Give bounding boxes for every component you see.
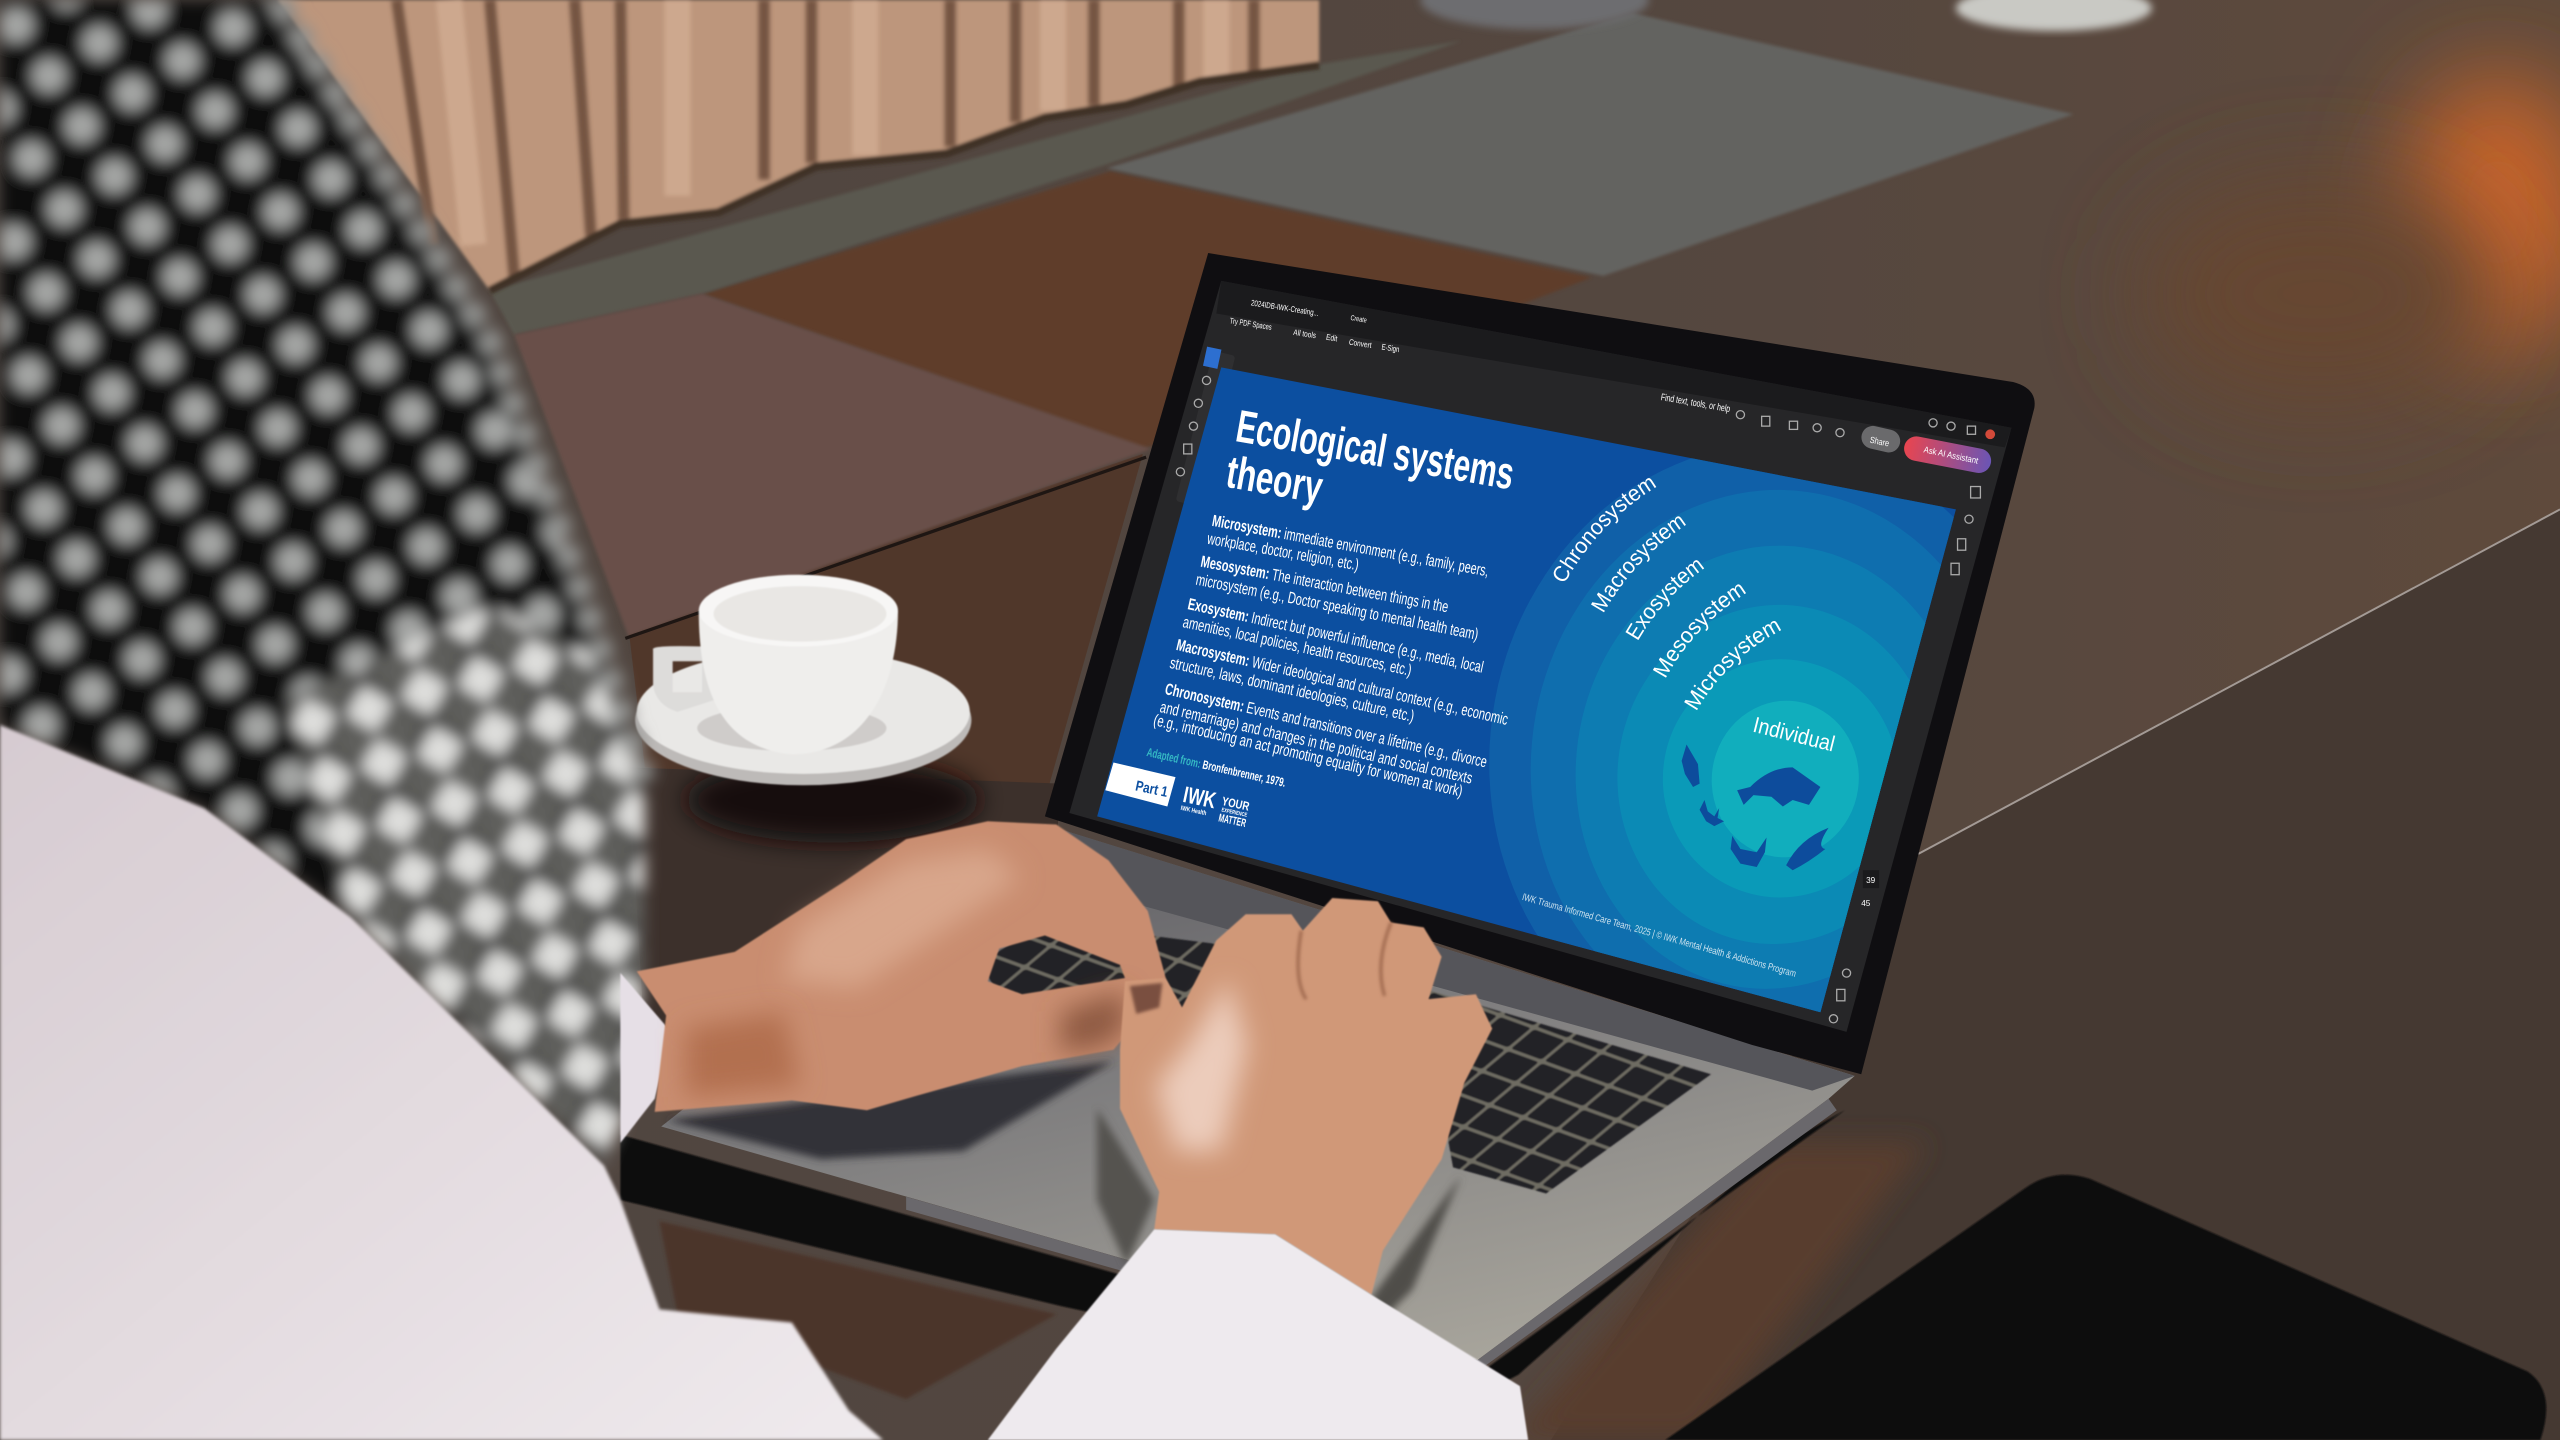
tabs and toolbar labels: All tools: [1293, 328, 1317, 340]
slide body text: (e.g., introducing an act promoting equality for women at work): [1152, 711, 1464, 801]
sea creatures: [1682, 744, 1829, 870]
left hand: [637, 821, 1166, 1112]
wrist tone: [686, 1012, 800, 1097]
right rail icons: [1829, 487, 1980, 1023]
tablet: [1665, 1175, 2546, 1440]
concentric rings: [1489, 458, 1954, 1012]
part 1 tab: [1105, 762, 1176, 807]
slide body text: [1152, 512, 1510, 801]
slide body text: amenities, local policies, health resources, etc.): [1181, 613, 1413, 680]
icon: crab: [1731, 836, 1767, 867]
ring labels: Microsystem: [1684, 621, 1781, 710]
page numbers: 45: [1861, 899, 1871, 908]
logos: IWK Health: [1180, 805, 1207, 817]
share button: [1859, 424, 1902, 455]
right sleeve cuff: [988, 1229, 1528, 1440]
slide title: Ecological systems: [1233, 400, 1518, 499]
logos: MATTER: [1217, 812, 1247, 830]
left leather mat: [514, 294, 1151, 638]
logos: EXPERIENCE: [1221, 808, 1248, 819]
right hand: [1120, 898, 1492, 1295]
laptop base: [661, 824, 1855, 1371]
shadow of right hand: [1097, 1109, 1154, 1265]
slide body text: Chronosystem: Events and transitions over a lifetime (e.g., divorce: [1163, 680, 1489, 771]
ring labels: Chronosystem: [1554, 478, 1656, 581]
slide body text: Exosystem: Indirect but powerful influence (e.g., media, local: [1186, 595, 1485, 677]
shadow of wrist: [1371, 1176, 1461, 1322]
tabs and toolbar labels: Create: [1350, 313, 1367, 325]
top right icons: [1736, 411, 1995, 439]
slide body text: Mesosystem: The interaction between things in the: [1199, 553, 1450, 616]
keffiyeh scarf: [0, 0, 645, 1166]
page numbers: 39: [1866, 876, 1876, 885]
mat under laptop: [660, 1221, 1056, 1399]
slide body text: and remarriage) and changes in the political and social contexts: [1158, 698, 1474, 788]
white shirt: [0, 725, 883, 1440]
page numbers: [1861, 876, 1876, 908]
curtain: [278, 0, 1319, 291]
top place mat: [1107, 13, 2073, 276]
tabs and toolbar labels: Convert: [1348, 338, 1373, 350]
left tool rail: [1176, 347, 1235, 506]
left cuff: [620, 973, 671, 1143]
slide body text: Macrosystem: Wider ideological and cultural context (e.g., economic: [1175, 636, 1510, 729]
thumb shadow: [1061, 991, 1127, 1053]
shadow of left hand: [666, 1061, 1113, 1159]
ring labels: Mesosystem: [1653, 584, 1746, 678]
slide background: [1097, 367, 1956, 1012]
ring labels: Exosystem: [1626, 560, 1704, 640]
share button: Share: [1869, 435, 1890, 448]
slide title: theory: [1223, 446, 1327, 513]
ask AI assistant pill: [1902, 434, 1993, 475]
tabs and toolbar labels: [1229, 298, 1731, 415]
ask AI assistant pill: Ask AI Assistant: [1923, 444, 1980, 466]
right knuckle creases: [1298, 922, 1391, 999]
slide body text: workplace, doctor, religion, etc.): [1205, 530, 1360, 574]
ring labels: Macrosystem: [1591, 516, 1686, 612]
background objects: [1420, 0, 2152, 31]
icon: large fish: [1737, 767, 1820, 807]
pale highlight of right hand: [1156, 980, 1247, 1151]
keyboard right: [1420, 988, 1711, 1193]
laptop underside shadow strip: [620, 1110, 1845, 1399]
table seam line: [1918, 509, 2560, 854]
slide footer: IWK Trauma Informed Care Team, 2025 | © IWK Mental Health & Addictions Program: [1521, 892, 1797, 980]
ring labels: [1554, 478, 1837, 756]
logos: YOUR: [1221, 794, 1251, 814]
laptop lid: [1045, 253, 2035, 1074]
slide title: [1223, 400, 1518, 513]
slide body text: structure, laws, dominant ideologies, culture, etc.): [1168, 654, 1416, 726]
tabs and toolbar labels: Try PDF Spaces: [1229, 316, 1272, 332]
grey floor strip: [490, 41, 1461, 335]
ring labels: Individual: [1751, 712, 1837, 756]
tabs and toolbar labels: Edit: [1325, 333, 1339, 343]
scarf fringe edge: [278, 0, 645, 780]
icon: coral: [1700, 800, 1724, 826]
pdf viewer chrome: [1069, 281, 2011, 1032]
tabs and toolbar labels: E-Sign: [1381, 342, 1400, 354]
icon: small fish: [1682, 744, 1700, 787]
tabs and toolbar labels: Find text, tools, or help: [1660, 392, 1731, 415]
tabs and toolbar labels: 2024IDB-IWK-Creating...: [1250, 298, 1319, 318]
coffee saucer shadow: [686, 758, 980, 842]
adapted from credit: Adapted from: Bronfenbrenner, 1979.: [1145, 745, 1287, 790]
slide body text: microsystem (e.g., Doctor speaking to mental health team): [1194, 571, 1480, 644]
coffee cup and saucer: [635, 575, 971, 785]
part 1 tab: Part 1: [1134, 778, 1169, 801]
highlight on back of hand: [784, 849, 1020, 988]
icon: seaweed: [1786, 828, 1829, 870]
thumb tip shadow: [1130, 983, 1162, 1014]
slide body text: Microsystem: immediate environment (e.g., family, peers,: [1211, 512, 1490, 580]
logos: [1180, 781, 1251, 830]
logos: IWK: [1181, 781, 1219, 813]
scarf lower check area: [286, 604, 645, 1166]
keyboard left: [980, 922, 1241, 1029]
